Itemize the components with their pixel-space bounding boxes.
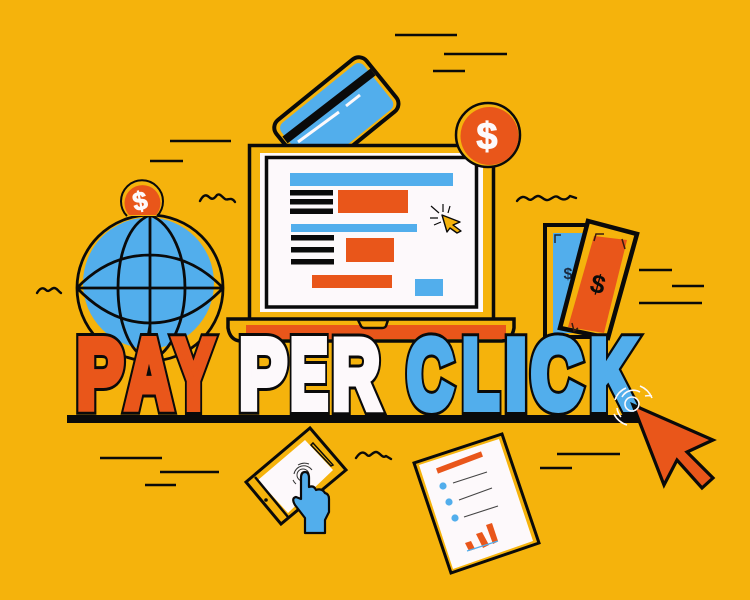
icon: blue banknote: $ [564, 266, 573, 283]
title word: PER: R [332, 319, 380, 429]
title word: PAY: Y [174, 319, 214, 429]
laptop screen [266, 158, 476, 307]
title word: PER: P [239, 319, 287, 429]
icon: screen cursor [430, 204, 461, 233]
title word: CLICK: L [462, 319, 499, 429]
title word: PAY: P [76, 319, 124, 429]
icon: blue banknote [545, 225, 595, 337]
icon: small dollar coin: $ [130, 185, 151, 217]
title word: PAY: Y [174, 319, 214, 429]
title word: PER: R [332, 319, 380, 429]
bullet list [439, 472, 498, 522]
icon: small dollar coin [121, 180, 163, 217]
hand [293, 472, 329, 533]
title word: PER: P [239, 319, 287, 429]
title word: CLICK: C [531, 319, 582, 429]
laptop lid [250, 146, 494, 320]
icon: large arrow cursor [614, 386, 713, 488]
icon: large dollar coin: $ [476, 116, 498, 158]
laptop base [228, 319, 514, 341]
title word: CLICK: L [462, 319, 499, 429]
decorative speed lines [37, 35, 704, 485]
laptop screen frame [260, 153, 483, 312]
title word: PAY: A [126, 319, 172, 429]
title word: CLICK: C [407, 319, 453, 429]
icon: credit card [272, 55, 400, 144]
title word: PAY: A [126, 319, 172, 429]
title: PAY PER CLICK [76, 319, 636, 429]
shelf line [67, 415, 639, 423]
icon: globe [77, 215, 223, 361]
title word: CLICK: C [407, 319, 453, 429]
title word: PAY [76, 319, 214, 429]
title word: CLICK: K [590, 319, 636, 429]
icon: large dollar coin [456, 103, 520, 167]
title word: CLICK: I [505, 319, 527, 429]
icon: orange banknote [560, 221, 637, 338]
mini bar chart [465, 523, 498, 551]
icon: orange banknote: $ [587, 268, 609, 300]
title word: CLICK: K [590, 319, 636, 429]
click rings [614, 386, 652, 425]
icon: tablet with tapping hand [246, 428, 346, 533]
title word: PAY: P [76, 319, 124, 429]
title word: CLICK [407, 319, 636, 429]
title word: PER: E [290, 319, 328, 429]
title word: PER: E [290, 319, 328, 429]
laptop [228, 146, 514, 341]
title word: CLICK: C [531, 319, 582, 429]
title word: CLICK: I [505, 319, 527, 429]
icon: report document [414, 434, 539, 573]
title word: PER [239, 319, 380, 429]
